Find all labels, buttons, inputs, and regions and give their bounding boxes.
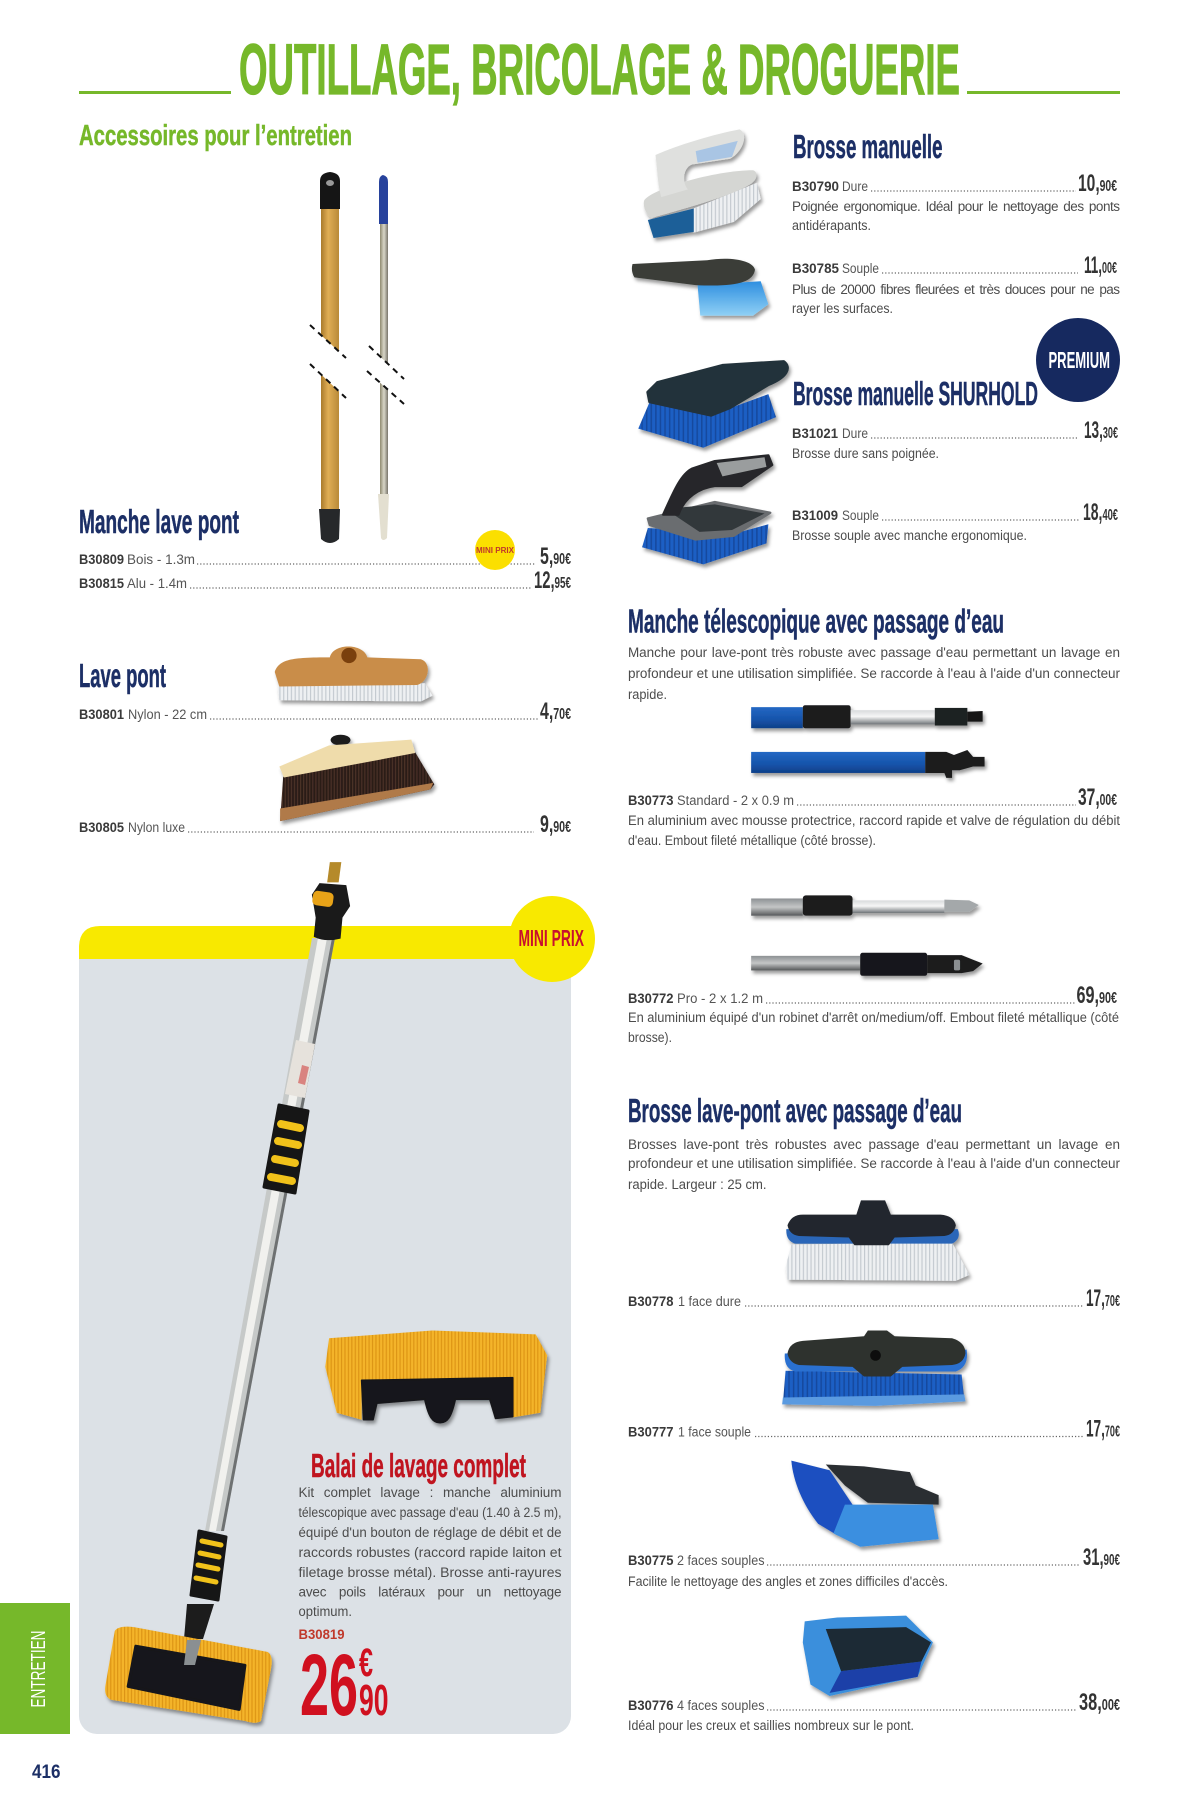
- row B30809: [79, 543, 571, 570]
- image: brosse bleue: [782, 1331, 967, 1406]
- subtitle: accessoires: Accessoires pour l’entretien: [79, 120, 352, 152]
- row B30815: [79, 567, 571, 594]
- section: manche telescopique: [628, 602, 1120, 1045]
- description B30776: Idéal pour les creux et saillies nombreux sur le pont.: [628, 1718, 914, 1733]
- description B31021: Brosse dure sans poignée.: [792, 446, 939, 461]
- product description: raccords robustes (raccord rapide laiton et: [298, 1545, 562, 1560]
- product description: optimum.: [298, 1604, 352, 1619]
- row B30776: B30776: [628, 1698, 674, 1713]
- badge: premium: [1036, 318, 1120, 402]
- description B30785: Plus de 20000 fibres fleurées et très douces pour ne pas: [792, 282, 1120, 297]
- row B30805: Nylon luxe: [128, 820, 185, 835]
- row B30815: 12,95€: [534, 567, 571, 594]
- row B30809: Bois - 1.3m: [127, 552, 195, 567]
- row B30775: 31,90€: [1083, 1544, 1120, 1571]
- image: brosse shurhold souple: [642, 455, 772, 564]
- row B30785: [792, 252, 1117, 279]
- image: manches lave pont: [310, 172, 404, 543]
- intro text: Brosses lave-pont très robustes avec passage d'eau permettant un lavage en: [628, 1137, 1120, 1152]
- product description: filetage brosse métal). Brosse anti-rayures: [298, 1565, 562, 1580]
- product description: équipé d'un bouton de réglage de débit et de: [298, 1525, 562, 1540]
- row B31009: 18,40€: [1083, 499, 1118, 526]
- badge: mini prix: [509, 896, 595, 982]
- description B30785: [792, 282, 1120, 316]
- product title: Balai de lavage complet: [311, 1447, 526, 1484]
- row B30775: 2 faces souples: [677, 1553, 765, 1568]
- panel: balai de lavage complet: [79, 862, 595, 1734]
- badge: mini prix: MINI PRIX: [518, 925, 584, 951]
- row B30815: B30815: [79, 576, 124, 591]
- image: lave pont nylon luxe: [279, 735, 434, 821]
- heading: Lave pont: [79, 657, 166, 694]
- product description: avec poils latéraux pour un nettoyage: [298, 1584, 562, 1600]
- row B30772: [628, 982, 1117, 1009]
- brush head on pole: [105, 1627, 272, 1723]
- row B30790: [792, 170, 1117, 197]
- row B30785: Souple: [842, 261, 879, 276]
- image: brosse manuelle blanche: [644, 129, 761, 238]
- row B30805: B30805: [79, 820, 124, 835]
- image: brosse manuelle souple: [632, 259, 768, 316]
- description B30785: rayer les surfaces.: [792, 301, 893, 316]
- image: brosse blanche: [786, 1200, 969, 1281]
- description B30773: En aluminium avec mousse protectrice, raccord rapide et valve de régulation du débit: [628, 813, 1120, 828]
- image: brosse orange: [325, 1331, 547, 1423]
- row B30778: 17,70€: [1086, 1285, 1120, 1312]
- row B31021: B31021: [792, 426, 838, 441]
- description B30772: En aluminium équipé d'un robinet d'arrêt on/medium/off. Embout fileté métallique (côté: [628, 1010, 1119, 1025]
- description B30790: antidérapants.: [792, 218, 871, 233]
- heading: Brosse lave-pont avec passage d’eau: [628, 1092, 962, 1129]
- section: manche lave pont: [79, 503, 571, 594]
- image: manches bleus: [751, 705, 985, 778]
- badge: premium: PREMIUM: [1048, 347, 1110, 373]
- row B30772: B30772: [628, 991, 674, 1006]
- description B30772: brosse).: [628, 1030, 672, 1045]
- section: brosse manuelle shurhold: [638, 318, 1120, 564]
- product description: Kit complet lavage : manche aluminium: [298, 1485, 562, 1500]
- badge: mini prix small: [475, 530, 515, 570]
- row B30773: [628, 784, 1117, 811]
- product code: B30819: [298, 1627, 344, 1642]
- row B30801: B30801: [79, 707, 124, 722]
- row B30773: 37,00€: [1078, 784, 1117, 811]
- product description: [298, 1485, 562, 1619]
- row B30772: Pro - 2 x 1.2 m: [677, 991, 763, 1006]
- row B30805: [79, 811, 571, 838]
- row B30778: 1 face dure: [678, 1294, 741, 1309]
- description B30772: [628, 1010, 1119, 1045]
- intro text: profondeur et une utilisation simplifiée. Se raccorde à l'eau à l'aide d'un connecteur: [628, 1156, 1120, 1171]
- row B30790: Dure: [842, 179, 868, 194]
- panel background: [79, 955, 571, 1734]
- intro text: rapide.: [628, 687, 667, 702]
- section: brosse manuelle: [632, 128, 1120, 316]
- badge: mini prix small: MINI PRIX: [476, 546, 515, 555]
- intro text: profondeur et une utilisation simplifiée. Se raccorde à l'eau à l'aide d'un connecteur: [628, 666, 1120, 681]
- section: brosse lave-pont: [628, 1092, 1120, 1733]
- row B30775: B30775: [628, 1553, 674, 1568]
- intro text: Manche pour lave-pont très robuste avec passage d'eau permettant un lavage en: [628, 645, 1120, 660]
- image: kit manche telescopique: [105, 862, 350, 1723]
- image: brosse shurhold dure: [638, 362, 787, 448]
- product description: télescopique avec passage d'eau (1.40 à 2.5 m),: [298, 1505, 562, 1520]
- image: lave pont nylon: [275, 646, 432, 701]
- row B30777: 17,70€: [1086, 1416, 1120, 1442]
- row B30809: 5,90€: [540, 543, 571, 570]
- row B30773: B30773: [628, 793, 674, 808]
- description B30773: [628, 813, 1120, 848]
- row B30778: B30778: [628, 1294, 674, 1309]
- row B30775: [628, 1544, 1120, 1571]
- row B30809: B30809: [79, 552, 124, 567]
- row B30785: B30785: [792, 261, 839, 276]
- description B31009: Brosse souple avec manche ergonomique.: [792, 528, 1027, 543]
- intro text: rapide. Largeur : 25 cm.: [628, 1177, 766, 1192]
- section: lave pont: [79, 646, 571, 838]
- row B30776: [628, 1689, 1120, 1716]
- row B31021: 13,30€: [1084, 417, 1118, 444]
- row B30776: 4 faces souples: [677, 1698, 765, 1713]
- image: manches aluminium: [751, 895, 983, 976]
- row B31021: Dure: [842, 426, 868, 441]
- row B30801: Nylon - 22 cm: [128, 707, 207, 722]
- row B30776: 38,00€: [1079, 1689, 1120, 1716]
- image: brosse 4 faces: [803, 1616, 933, 1696]
- row B30777: [628, 1416, 1120, 1442]
- description B30775: Facilite le nettoyage des angles et zones difficiles d'accès.: [628, 1574, 948, 1589]
- row B30777: 1 face souple: [678, 1424, 751, 1440]
- row B30790: B30790: [792, 179, 839, 194]
- row B30778: [628, 1285, 1120, 1312]
- row B31009: [792, 499, 1118, 526]
- page number: 416: [32, 1761, 61, 1783]
- image: brosse 2 faces: [791, 1461, 939, 1547]
- yellow band: [79, 926, 552, 959]
- heading: Brosse manuelle: [793, 128, 942, 165]
- row B30801: [79, 698, 571, 725]
- row B31009: B31009: [792, 508, 838, 523]
- row B30801: 4,70€: [540, 698, 571, 725]
- product price: €: [359, 1641, 373, 1685]
- row B31009: Souple: [842, 508, 879, 523]
- row B30772: 69,90€: [1076, 982, 1117, 1009]
- description B30790: Poignée ergonomique. Idéal pour le nettoyage des ponts: [792, 199, 1120, 214]
- product price: 90: [359, 1676, 388, 1725]
- product price: 26: [300, 1637, 358, 1734]
- row B30785: 11,00€: [1084, 252, 1117, 279]
- description B30790: [792, 199, 1120, 233]
- description B30773: d'eau. Embout fileté métallique (côté brosse).: [628, 833, 876, 848]
- row B30815: Alu - 1.4m: [127, 576, 187, 591]
- row B30773: Standard - 2 x 0.9 m: [677, 793, 794, 808]
- side tab: entretien: [0, 1603, 70, 1734]
- side tab: entretien: ENTRETIEN: [28, 1630, 50, 1708]
- row B30805: 9,90€: [540, 811, 571, 838]
- row B30790: 10,90€: [1078, 170, 1117, 197]
- heading: Manche lave pont: [79, 503, 239, 540]
- intro text: [628, 645, 1120, 702]
- row B30777: B30777: [628, 1424, 674, 1440]
- row B31021: [792, 417, 1118, 444]
- intro text: [628, 1137, 1120, 1192]
